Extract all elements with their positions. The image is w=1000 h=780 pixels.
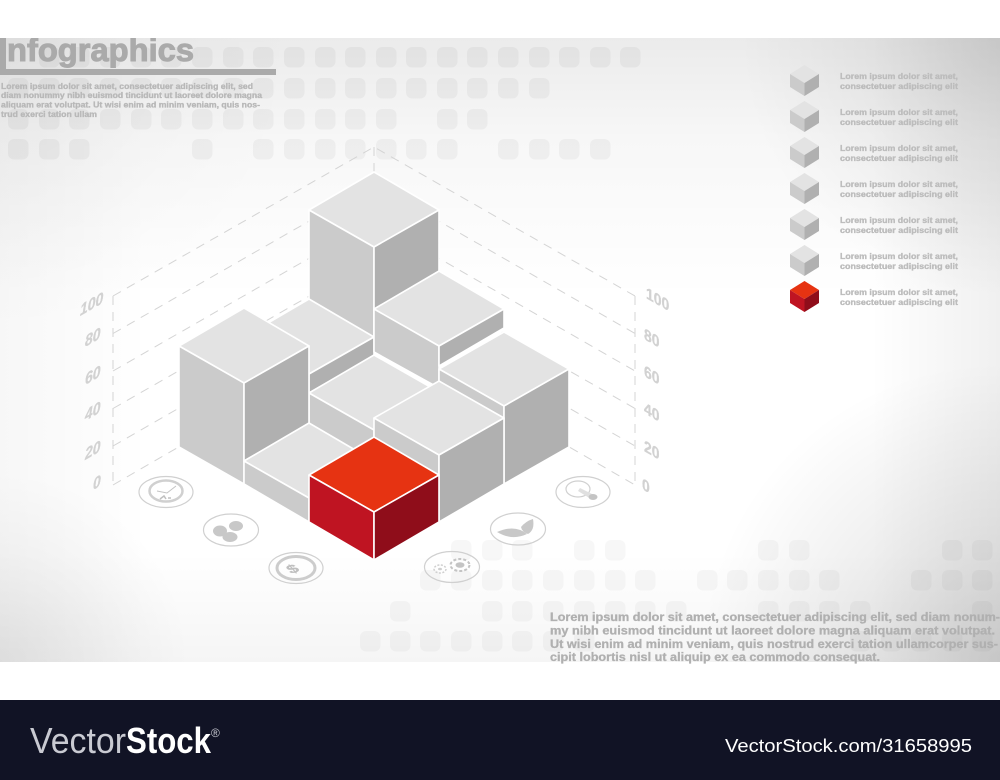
block: front left low	[244, 423, 374, 522]
icon: leaf	[490, 513, 546, 545]
block: centre	[309, 355, 439, 462]
legend item 3	[790, 137, 958, 168]
block: tall left	[179, 308, 309, 484]
icon: dollar	[269, 552, 323, 584]
bottom text block: cipit lobortis nisl ut aliquip ex ea commodo consequat.	[550, 652, 880, 664]
left axis labels	[80, 289, 103, 494]
right axis labels: 60	[644, 362, 660, 389]
footer image id: VectorStock.com/31658995	[725, 736, 972, 756]
legend item 5: consectetuer adipiscing elit	[840, 225, 958, 235]
right axis labels	[642, 284, 669, 497]
intro text block: Lorem ipsum dolor sit amet, consectetuer adipiscing elit, sed	[1, 81, 253, 91]
top rounded-square pattern	[8, 47, 640, 160]
left axis labels: 80	[85, 324, 101, 351]
footer logo	[30, 720, 220, 761]
right axis labels: 0	[642, 475, 650, 497]
block: front right	[374, 381, 504, 522]
legend item 1: consectetuer adipiscing elit	[840, 81, 958, 91]
background panel	[0, 38, 1000, 662]
intro text block: aliquam erat volutpat. Ut wisi enim ad minim veniam, quis nos-	[1, 100, 260, 110]
right axis labels: 40	[644, 399, 660, 426]
legend item 5	[790, 209, 958, 240]
legend item 2	[790, 101, 958, 132]
intro text block: diam nonummy nibh euismod tincidunt ut laoreet dolore magna	[1, 90, 262, 100]
legend item 7 red: consectetuer adipiscing elit	[840, 297, 958, 307]
left axis labels: 60	[85, 362, 101, 389]
block: far right	[439, 332, 569, 484]
legend item 6: Lorem ipsum dolor sit amet,	[840, 251, 958, 261]
legend item 4: consectetuer adipiscing elit	[840, 189, 958, 199]
legend item 6	[790, 245, 958, 276]
title: nfographics	[7, 32, 194, 68]
right axis labels: 20	[644, 437, 660, 464]
icon: clock	[139, 476, 193, 508]
bottom text block: Lorem ipsum dolor sit amet, consectetuer adipiscing elit, sed diam nonum-	[550, 612, 1000, 624]
block: tall back	[309, 172, 439, 345]
legend item 4	[790, 173, 958, 204]
right axis labels: 100	[646, 284, 669, 315]
legend item 7 red	[790, 281, 958, 312]
right axis labels: 80	[644, 325, 660, 352]
legend item 3: consectetuer adipiscing elit	[840, 153, 958, 163]
legend item 6: consectetuer adipiscing elit	[840, 261, 958, 271]
block: red highlight	[309, 437, 439, 560]
left axis labels: 100	[80, 289, 103, 320]
legend item 7 red: Lorem ipsum dolor sit amet,	[840, 287, 958, 297]
title	[0, 38, 276, 75]
footer bar	[0, 700, 1000, 780]
legend item 2: Lorem ipsum dolor sit amet,	[840, 107, 958, 117]
footer logo: Vector	[30, 720, 126, 761]
legend item 4: Lorem ipsum dolor sit amet,	[840, 179, 958, 189]
intro text block: trud exerci tation ullam	[1, 109, 97, 119]
footer logo: ®	[211, 726, 220, 740]
legend item 1	[790, 65, 958, 96]
left axis labels: 0	[93, 472, 101, 494]
block: low back left	[244, 299, 374, 393]
legend item 3: Lorem ipsum dolor sit amet,	[840, 143, 958, 153]
axis grid	[113, 147, 635, 485]
legend	[790, 65, 958, 312]
icon: dollar: $	[283, 562, 303, 577]
bottom text block: Ut wisi enim ad minim veniam, quis nostrud exerci tation ullamcorper sus-	[550, 639, 998, 651]
block: mid back right	[374, 271, 504, 388]
legend item 5: Lorem ipsum dolor sit amet,	[840, 215, 958, 225]
footer logo: Stock	[126, 720, 212, 761]
icon: gears	[424, 552, 480, 582]
left axis labels: 40	[84, 398, 101, 425]
bottom text block	[550, 612, 1000, 664]
legend item 2: consectetuer adipiscing elit	[840, 117, 958, 127]
icon: light bulb	[556, 476, 610, 508]
left axis labels: 20	[84, 437, 101, 464]
isometric block chart	[179, 172, 569, 560]
bottom text block: my nibh euismod tincidunt ut laoreet dolore magna aliquam erat volutpat.	[550, 626, 995, 638]
bottom rounded-square pattern	[360, 540, 992, 652]
icon: people	[204, 514, 258, 546]
legend item 1: Lorem ipsum dolor sit amet,	[840, 71, 958, 81]
intro text block	[1, 81, 262, 119]
